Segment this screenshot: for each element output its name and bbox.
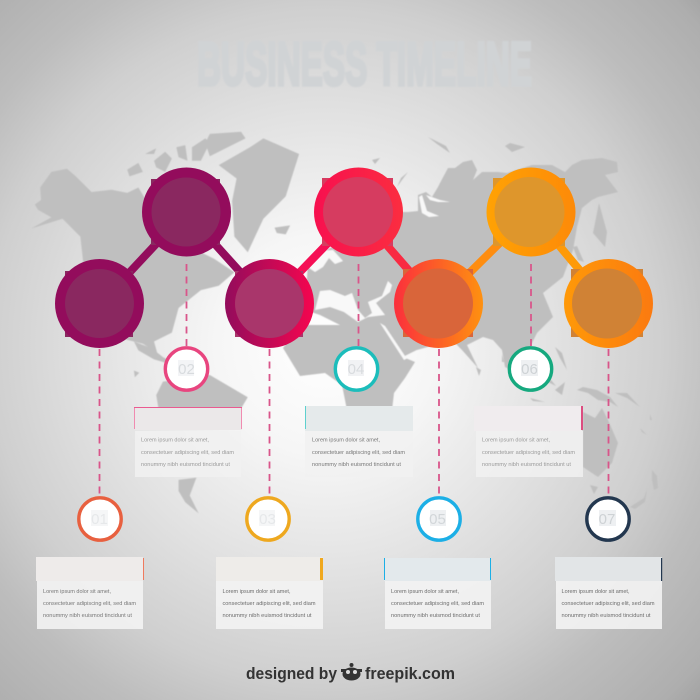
- step 02 badge: 02: [178, 361, 195, 378]
- card 05: consectetuer adipiscing elit, sed diam: [391, 601, 484, 607]
- card 06: [474, 406, 583, 477]
- card 02: [134, 407, 242, 477]
- card 01: Lorem ipsum dolor sit amet,: [43, 589, 111, 595]
- card 06: Lorem ipsum dolor sit amet,: [482, 438, 550, 444]
- step 01 badge: 01: [91, 511, 108, 528]
- card 01: [36, 557, 144, 629]
- footer credit: designed by: [246, 665, 338, 683]
- card 07: consectetuer adipiscing elit, sed diam: [562, 601, 655, 607]
- card 03: nonummy nibh euismod tincidunt ut: [222, 613, 312, 619]
- card 05: Lorem ipsum dolor sit amet,: [391, 589, 459, 595]
- world map: [31, 132, 658, 513]
- step 04 badge: 04: [348, 361, 364, 378]
- card 04: [305, 406, 413, 477]
- card 03: consectetuer adipiscing elit, sed diam: [222, 601, 316, 607]
- connector lines: [100, 212, 608, 304]
- icon: freepik mascot: [341, 663, 362, 680]
- card 05: nonummy nibh euismod tincidunt ut: [391, 613, 480, 619]
- card 03: Lorem ipsum dolor sit amet,: [222, 589, 291, 595]
- card 02: Lorem ipsum dolor sit amet,: [141, 438, 209, 444]
- card 03: [216, 557, 323, 629]
- card 04: Lorem ipsum dolor sit amet,: [312, 438, 380, 444]
- step 07 badge: 07: [599, 511, 615, 528]
- step 01 badge: [79, 498, 121, 540]
- footer credit: [246, 663, 455, 683]
- footer credit: freepik.com: [365, 665, 455, 683]
- card 01: consectetuer adipiscing elit, sed diam: [43, 601, 136, 607]
- card 05: [384, 558, 491, 629]
- step 03 badge: 03: [259, 511, 276, 528]
- step 04 badge: [335, 348, 378, 390]
- node 5 large circle: [394, 259, 483, 348]
- node 1 large circle: [55, 259, 144, 348]
- node 3 large circle: [225, 259, 314, 348]
- step 06 badge: 06: [521, 361, 538, 378]
- dashed drop lines: [100, 264, 608, 496]
- step 06 badge: [509, 348, 552, 390]
- card 02: nonummy nibh euismod tincidunt ut: [141, 462, 230, 468]
- card 02: consectetuer adipiscing elit, sed diam: [141, 450, 234, 456]
- card 06: consectetuer adipiscing elit, sed diam: [482, 450, 575, 456]
- card 07: nonummy nibh euismod tincidunt ut: [562, 613, 651, 619]
- node 6 large circle: [486, 168, 576, 256]
- card 01: nonummy nibh euismod tincidunt ut: [43, 613, 132, 619]
- node 4 large circle: [314, 168, 403, 256]
- node 2 large circle: [142, 168, 231, 256]
- step 02 badge: [165, 348, 208, 390]
- step 03 badge: [247, 498, 289, 540]
- card 04: nonummy nibh euismod tincidunt ut: [312, 462, 401, 468]
- card 04: consectetuer adipiscing elit, sed diam: [312, 450, 405, 456]
- card 06: nonummy nibh euismod tincidunt ut: [482, 462, 571, 468]
- card 07: [555, 557, 662, 629]
- node 7 large circle: [564, 259, 653, 348]
- step 05 badge: 05: [429, 511, 446, 528]
- card 07: Lorem ipsum dolor sit amet,: [562, 589, 630, 595]
- step 05 badge: [418, 498, 460, 540]
- step 07 badge: [587, 498, 629, 540]
